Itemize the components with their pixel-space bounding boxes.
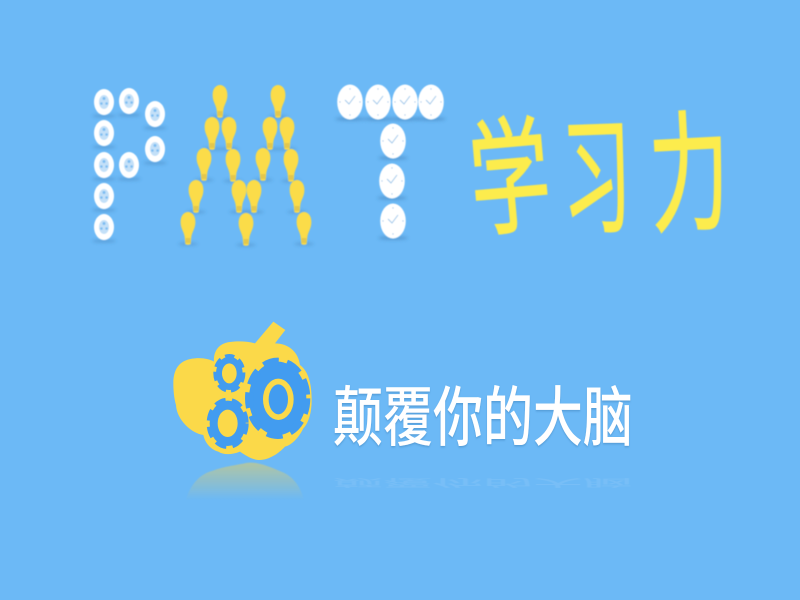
medium gear — [210, 401, 246, 446]
title: 学习力: 力 — [644, 69, 734, 261]
brain silhouette — [173, 322, 312, 460]
letter P made of flower icons — [92, 88, 167, 243]
small gear — [216, 357, 243, 390]
icon: brain with gears — [173, 322, 312, 460]
letter T made of clock icons — [335, 84, 446, 240]
title: 学习力: 学 — [461, 75, 557, 263]
subtitle: 颠覆你的大脑: 颠覆你的大脑 — [333, 383, 633, 455]
title: 学习力 — [461, 69, 734, 263]
brain reflection — [186, 463, 304, 500]
subtitle reflection: 颠覆你的大脑 — [333, 477, 633, 488]
title: 学习力: 习 — [559, 74, 634, 261]
letter M made of light bulb icons — [178, 85, 314, 247]
large gear — [249, 362, 306, 435]
